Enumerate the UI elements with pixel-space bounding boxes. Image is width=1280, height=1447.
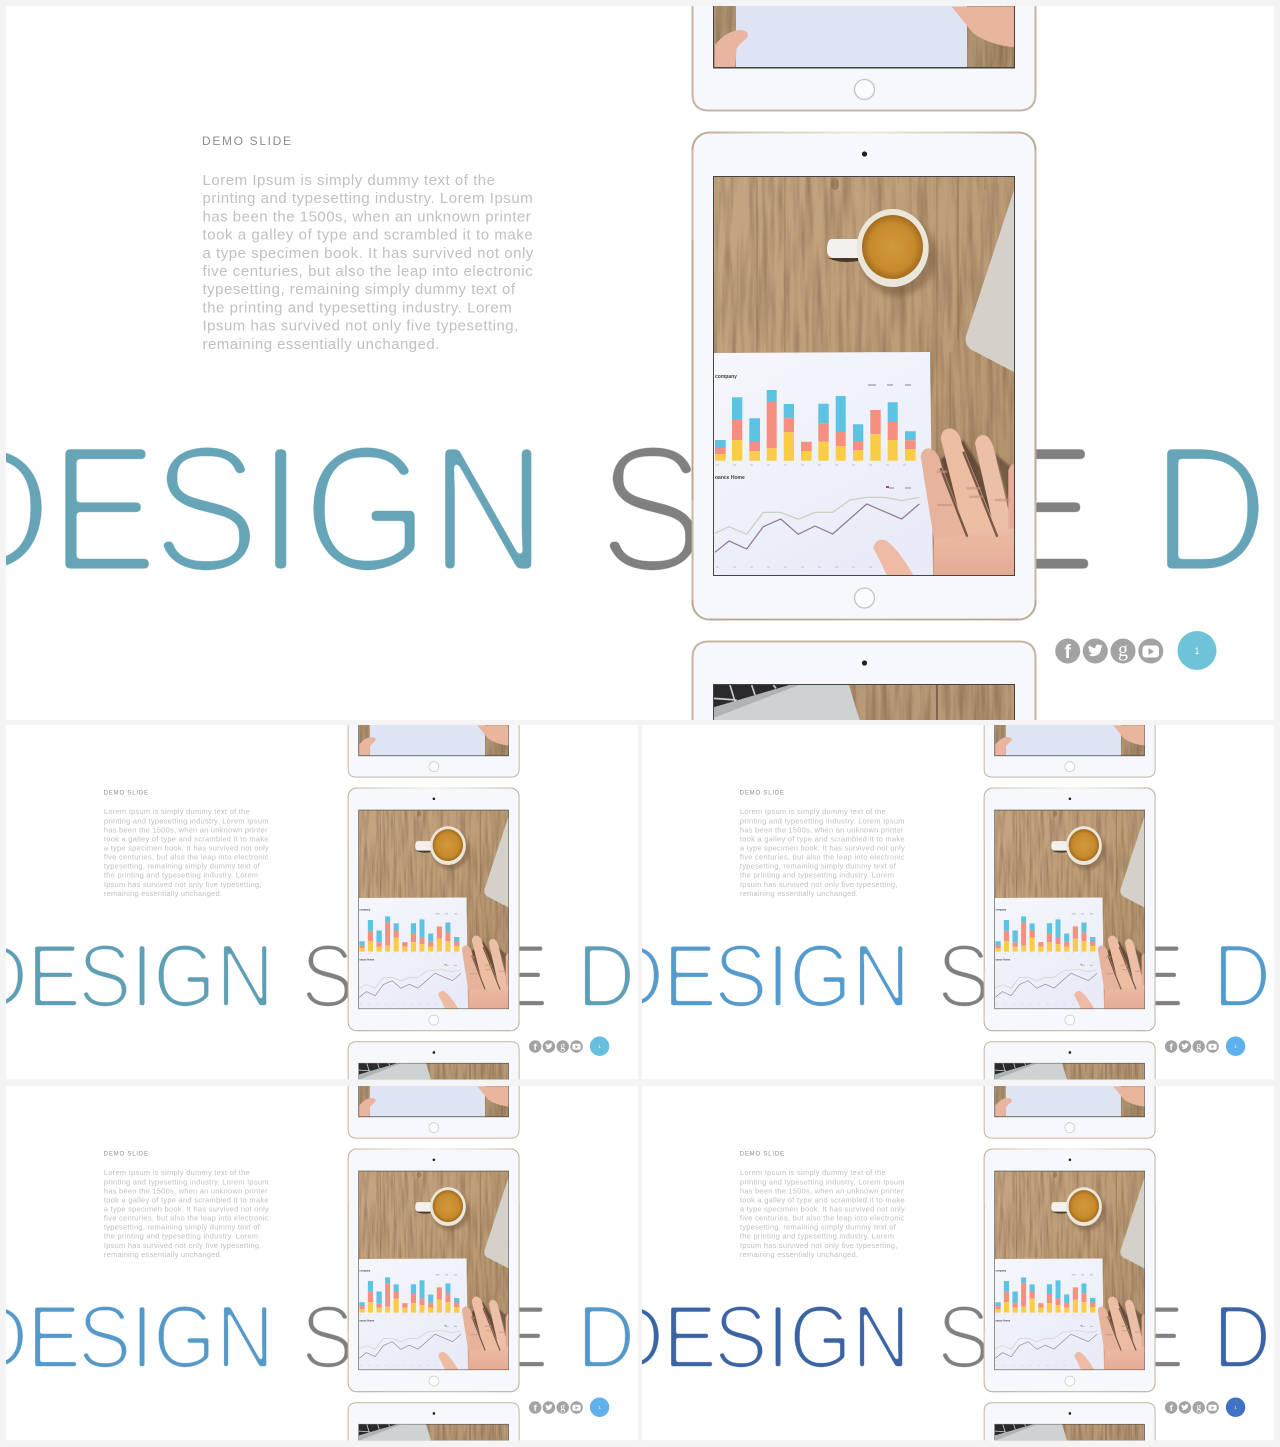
icon: facebook: f	[1170, 1403, 1174, 1414]
large title	[606, 1286, 1271, 1386]
large title: SLIDE	[301, 925, 549, 1025]
panel: slide variant teal	[0, 722, 638, 1086]
text block: body copy: remaining essentially unchanged.	[740, 889, 858, 898]
icon: google plus: g	[1196, 1402, 1201, 1413]
text block: body copy: the printing and typesetting industry. Lorem	[740, 871, 894, 880]
text block: body copy: Lorem Ipsum is simply dummy text of the	[202, 172, 495, 189]
large title	[6, 946, 630, 1006]
heading: demo slide: DEMO SLIDE	[104, 790, 149, 796]
icon: youtube	[1206, 1040, 1219, 1053]
icon row: social	[529, 1401, 583, 1414]
chart captions	[359, 908, 375, 962]
icon: twitter	[1179, 1401, 1191, 1414]
tablets with photo	[984, 722, 1155, 1086]
large title: SLIDE	[598, 410, 1097, 609]
text block: body copy: typesetting, remaining simply dummy text of	[202, 281, 516, 298]
page number badge	[590, 1036, 609, 1056]
panel: main slide	[0, 0, 1274, 730]
text block: body copy: printing and typesetting industry. Lorem Ipsum	[104, 1177, 269, 1186]
large title: SLIDE	[937, 1286, 1185, 1386]
icon: twitter	[1083, 638, 1108, 664]
text block: body copy: took a galley of type and scrambled it to make	[104, 1195, 269, 1204]
text block: body copy: a type specimen book. It has survived not only	[740, 1204, 905, 1213]
icon: facebook: f	[1170, 1042, 1174, 1053]
tablets with photo	[692, 0, 1036, 730]
large title: D	[1152, 410, 1268, 609]
large title: SLIDE	[937, 925, 1185, 1025]
text block: body copy: typesetting, remaining simply dummy text of	[104, 862, 261, 871]
icon: twitter	[543, 1401, 555, 1414]
page number badge: 1	[1234, 1405, 1237, 1410]
icon row: social	[1165, 1401, 1219, 1414]
text block: body copy: printing and typesetting industry. Lorem Ipsum	[104, 816, 269, 825]
text block: body copy: printing and typesetting industry. Lorem Ipsum	[202, 190, 533, 207]
text block: body copy	[740, 807, 905, 898]
chart captions	[995, 908, 1011, 962]
text block: body copy: Lorem Ipsum is simply dummy text of the	[104, 1168, 250, 1177]
page number badge	[1226, 1036, 1245, 1056]
text block: body copy: Lorem Ipsum is simply dummy text of the	[104, 807, 250, 816]
icon: facebook: f	[534, 1403, 538, 1414]
icon: facebook: f	[534, 1042, 538, 1053]
icon: google plus: g	[560, 1041, 565, 1052]
large title: D	[577, 925, 635, 1025]
text block: body copy: typesetting, remaining simply dummy text of	[740, 1223, 897, 1232]
panel: slide variant navy	[606, 1083, 1274, 1447]
tablets with photo	[348, 1083, 519, 1447]
large title	[6, 447, 1259, 570]
page number badge: 1	[598, 1044, 601, 1049]
chart captions	[715, 374, 745, 481]
large title: D	[1213, 925, 1271, 1025]
page number badge	[590, 1398, 609, 1417]
tablets with photo	[984, 1083, 1155, 1447]
icon: youtube	[570, 1040, 583, 1053]
icon: google plus: g	[560, 1402, 565, 1413]
large title: D	[1213, 1286, 1271, 1386]
text block: body copy: has been the 1500s, when an unknown printer	[202, 208, 531, 225]
chart captions: company	[359, 1269, 371, 1272]
text block: body copy: printing and typesetting industry. Lorem Ipsum	[740, 1177, 905, 1186]
text block: body copy	[202, 172, 534, 353]
text block: body copy: Ipsum has survived not only five typesetting,	[740, 1241, 897, 1250]
text block: body copy: Lorem Ipsum is simply dummy text of the	[740, 1168, 886, 1177]
text block: body copy: a type specimen book. It has survived not only	[104, 843, 269, 852]
panel: slide variant blue	[0, 1083, 638, 1447]
text block: body copy	[740, 1168, 905, 1259]
page number badge	[1226, 1398, 1245, 1417]
text block: body copy: printing and typesetting industry. Lorem Ipsum	[740, 816, 905, 825]
text block: body copy: has been the 1500s, when an unknown printer	[104, 825, 268, 834]
chart captions: oance Home	[995, 959, 1011, 962]
text block: body copy: has been the 1500s, when an unknown printer	[740, 825, 904, 834]
chart captions: company	[995, 908, 1007, 911]
chart captions: oance Home	[359, 959, 375, 962]
text block: body copy: the printing and typesetting industry. Lorem	[740, 1232, 894, 1241]
text block: body copy	[104, 807, 269, 898]
text block: body copy: a type specimen book. It has survived not only	[104, 1204, 269, 1213]
icon row: social	[1165, 1040, 1219, 1053]
large title: DESIGN	[606, 925, 910, 1025]
icon: youtube	[1206, 1401, 1219, 1414]
chart captions: oance Home	[995, 1320, 1011, 1323]
text block: body copy: five centuries, but also the leap into electronic	[104, 1214, 269, 1223]
large title: D	[577, 1286, 635, 1386]
tablets with photo	[348, 722, 519, 1086]
text block: body copy: Ipsum has survived not only five typesetting,	[202, 318, 518, 335]
text block: body copy: took a galley of type and scrambled it to make	[104, 834, 269, 843]
text block: body copy: five centuries, but also the leap into electronic	[740, 853, 905, 862]
icon row: social	[1055, 638, 1163, 664]
page number badge	[1178, 631, 1216, 670]
text block: body copy: remaining essentially unchanged.	[740, 1250, 858, 1259]
large title: DESIGN	[606, 1286, 910, 1386]
text block: body copy	[104, 1168, 269, 1259]
text block: body copy: has been the 1500s, when an unknown printer	[740, 1186, 904, 1195]
icon: twitter	[543, 1040, 555, 1053]
text block: body copy: the printing and typesetting industry. Lorem	[104, 871, 258, 880]
text block: body copy: typesetting, remaining simply dummy text of	[740, 862, 897, 871]
text block: body copy: remaining essentially unchanged.	[202, 336, 439, 353]
text block: body copy: the printing and typesetting industry. Lorem	[104, 1232, 258, 1241]
text block: body copy: Ipsum has survived not only five typesetting,	[104, 1241, 261, 1250]
text block: body copy: a type specimen book. It has survived not only	[740, 843, 905, 852]
chart captions	[359, 1269, 375, 1323]
heading: demo slide: DEMO SLIDE	[740, 1151, 785, 1157]
text block: body copy: the printing and typesetting industry. Lorem	[202, 299, 512, 316]
text block: body copy: remaining essentially unchanged.	[104, 889, 222, 898]
large title	[6, 1306, 630, 1368]
chart captions: company	[359, 908, 371, 911]
text block: body copy: took a galley of type and scrambled it to make	[740, 1195, 905, 1204]
text block: body copy: has been the 1500s, when an unknown printer	[104, 1186, 268, 1195]
text block: body copy: five centuries, but also the leap into electronic	[202, 263, 533, 280]
text block: body copy: a type specimen book. It has survived not only	[202, 245, 534, 262]
text block: body copy: Lorem Ipsum is simply dummy text of the	[740, 807, 886, 816]
chart captions: company	[995, 1269, 1007, 1272]
icon: youtube	[570, 1401, 583, 1414]
icon: google plus: g	[1118, 639, 1128, 661]
chart captions: company	[715, 374, 737, 380]
text block: body copy: Ipsum has survived not only five typesetting,	[104, 880, 261, 889]
page number badge: 1	[598, 1405, 601, 1410]
icon: facebook: f	[1065, 642, 1072, 663]
large title: SLIDE	[301, 1286, 549, 1386]
heading: demo slide: DEMO SLIDE	[202, 134, 293, 148]
text block: body copy: typesetting, remaining simply dummy text of	[104, 1223, 261, 1232]
page number badge: 1	[1234, 1044, 1237, 1049]
text block: body copy: took a galley of type and scrambled it to make	[740, 834, 905, 843]
icon: youtube	[1138, 638, 1163, 664]
chart captions: oance Home	[715, 475, 745, 481]
text block: body copy: remaining essentially unchanged.	[104, 1250, 222, 1259]
icon: twitter	[1179, 1040, 1191, 1053]
heading: demo slide: DEMO SLIDE	[740, 790, 785, 796]
heading: demo slide: DEMO SLIDE	[104, 1151, 149, 1157]
large title	[642, 946, 1266, 1006]
page number badge: 1	[1194, 646, 1200, 656]
text block: body copy: five centuries, but also the leap into electronic	[740, 1214, 905, 1223]
text block: body copy: took a galley of type and scrambled it to make	[202, 227, 533, 244]
chart captions: oance Home	[359, 1320, 375, 1323]
icon row: social	[529, 1040, 583, 1053]
panel: slide variant sky blue	[606, 722, 1274, 1086]
text block: body copy: five centuries, but also the leap into electronic	[104, 853, 269, 862]
icon: google plus: g	[1196, 1041, 1201, 1052]
text block: body copy: Ipsum has survived not only five typesetting,	[740, 880, 897, 889]
chart captions	[995, 1269, 1011, 1323]
